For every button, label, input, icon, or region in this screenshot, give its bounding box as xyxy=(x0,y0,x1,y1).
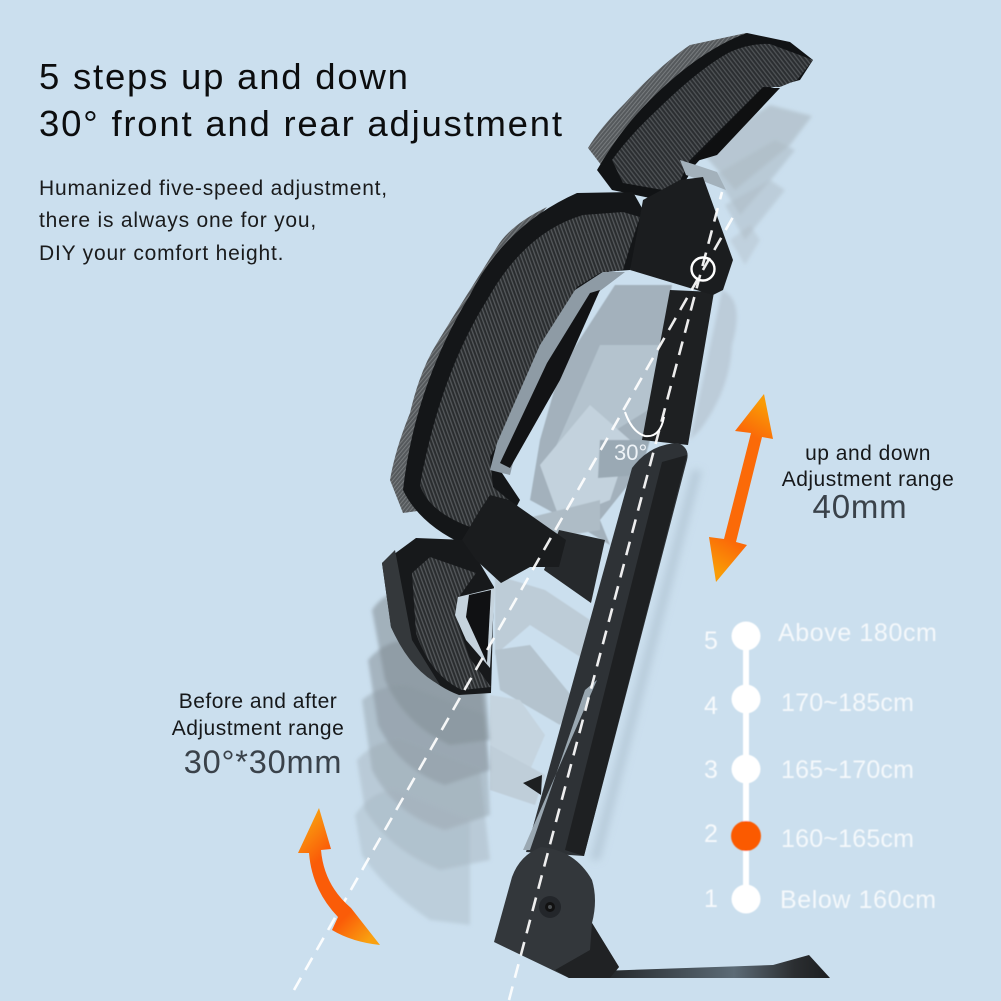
description: Humanized five-speed adjustment, xyxy=(39,177,388,200)
ghost positions of the headrest xyxy=(690,105,812,440)
callout: up and down range xyxy=(782,442,954,525)
lumbar pad xyxy=(382,538,495,695)
title: 5 steps up and down xyxy=(39,56,410,97)
scale labels: 165~170cm xyxy=(781,756,914,784)
scale numbers: 3 xyxy=(704,756,718,784)
bolt xyxy=(539,896,561,918)
headrest mesh pad xyxy=(612,44,813,190)
scale numbers xyxy=(704,627,718,913)
hinge bracket xyxy=(462,495,605,603)
head joint xyxy=(630,177,733,295)
handle notch xyxy=(523,775,542,795)
description: there is always one for you, xyxy=(39,209,317,232)
callout: before and after range xyxy=(172,690,344,780)
headrest xyxy=(588,33,813,198)
scale numbers: 2 xyxy=(704,820,718,848)
back black frame xyxy=(403,192,647,548)
pole and foot stand xyxy=(494,290,830,978)
description: DIY your comfort height. xyxy=(39,242,284,265)
callout: up and down range: 40mm xyxy=(813,488,907,525)
back mesh shell xyxy=(390,207,547,513)
dashed guide lines xyxy=(294,192,737,1000)
upper pole xyxy=(642,290,714,445)
lower pole xyxy=(526,443,688,856)
lumbar black frame xyxy=(382,538,494,695)
callout: before and after range: Before and after xyxy=(179,690,337,713)
scale numbers: 5 xyxy=(704,627,718,655)
pole shadow xyxy=(590,470,702,860)
ghost positions of the back frame xyxy=(490,285,672,805)
up and down arrow xyxy=(709,394,773,582)
scale numbers: 1 xyxy=(704,885,718,913)
curved arrow xyxy=(298,808,380,945)
description xyxy=(39,177,388,265)
active node xyxy=(731,821,761,851)
headrest mesh shell xyxy=(588,33,800,170)
callout: before and after range: Adjustment range xyxy=(172,717,344,740)
back slot xyxy=(490,272,625,475)
scale labels: 160~165cm xyxy=(781,825,914,853)
angle label: 30° xyxy=(614,440,647,465)
scale numbers: 4 xyxy=(704,692,718,720)
callout: up and down range: up and down xyxy=(805,442,931,465)
scale labels: Above 180cm xyxy=(778,619,937,647)
scale labels: Below 160cm xyxy=(780,886,937,914)
headrest black frame xyxy=(597,33,813,198)
angle arc xyxy=(625,412,664,436)
lumbar mesh xyxy=(412,557,491,690)
lumbar slot xyxy=(455,588,495,668)
base housing xyxy=(494,847,619,978)
callout: up and down range: Adjustment range xyxy=(782,468,954,491)
main back pad xyxy=(390,192,647,548)
height scale xyxy=(704,619,937,914)
scale labels xyxy=(778,619,937,914)
scale line xyxy=(743,636,749,899)
title: 30° front and rear adjustment xyxy=(39,103,564,144)
back mesh pad xyxy=(420,212,640,535)
foot plate xyxy=(590,955,830,978)
ghost positions of the lumbar pad xyxy=(355,590,490,925)
scale labels: 170~185cm xyxy=(781,689,914,717)
scale nodes xyxy=(732,622,760,914)
title xyxy=(39,56,564,144)
callout: before and after range: 30°*30mm xyxy=(184,744,342,780)
headrest slot xyxy=(690,88,780,163)
pivot circle xyxy=(692,258,714,280)
